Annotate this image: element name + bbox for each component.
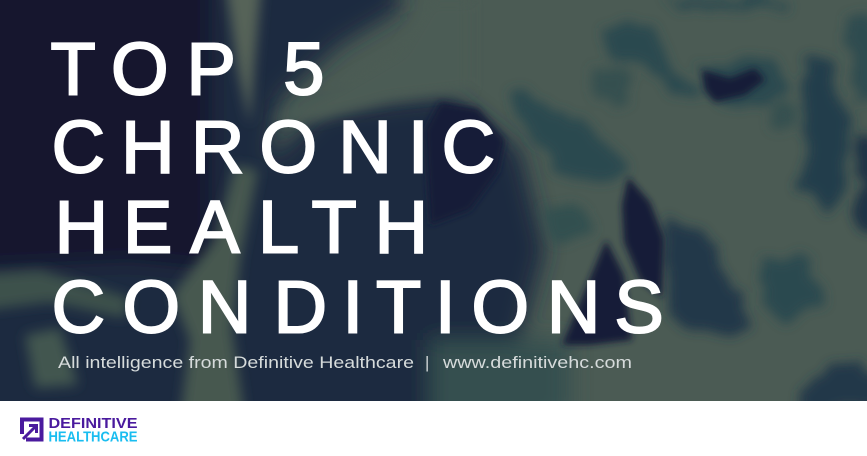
logo wordmark bbox=[48, 415, 138, 446]
navy accents bbox=[425, 68, 765, 345]
subtitle: www.definitivehc.com bbox=[442, 354, 632, 372]
lighter streaks bbox=[0, 0, 470, 420]
title: CHRONIC bbox=[52, 106, 495, 188]
icon: Definitive Healthcare arrow logo bbox=[20, 418, 44, 442]
title: HEALTH bbox=[55, 186, 428, 268]
logo wordmark: DEFINITIVE bbox=[48, 415, 138, 432]
subtitle bbox=[58, 354, 632, 372]
subtitle: All intelligence from Definitive Healthcare bbox=[58, 354, 414, 372]
title: CONDITIONS bbox=[52, 266, 664, 348]
title bbox=[50, 28, 664, 348]
subtitle: | bbox=[425, 354, 429, 372]
footer: white logo strip bbox=[0, 401, 867, 456]
title: TOP 5 bbox=[50, 28, 324, 110]
dark teal patches bbox=[505, 0, 867, 410]
logo wordmark: HEALTHCARE bbox=[48, 428, 138, 446]
big dark masses bbox=[0, 0, 574, 401]
